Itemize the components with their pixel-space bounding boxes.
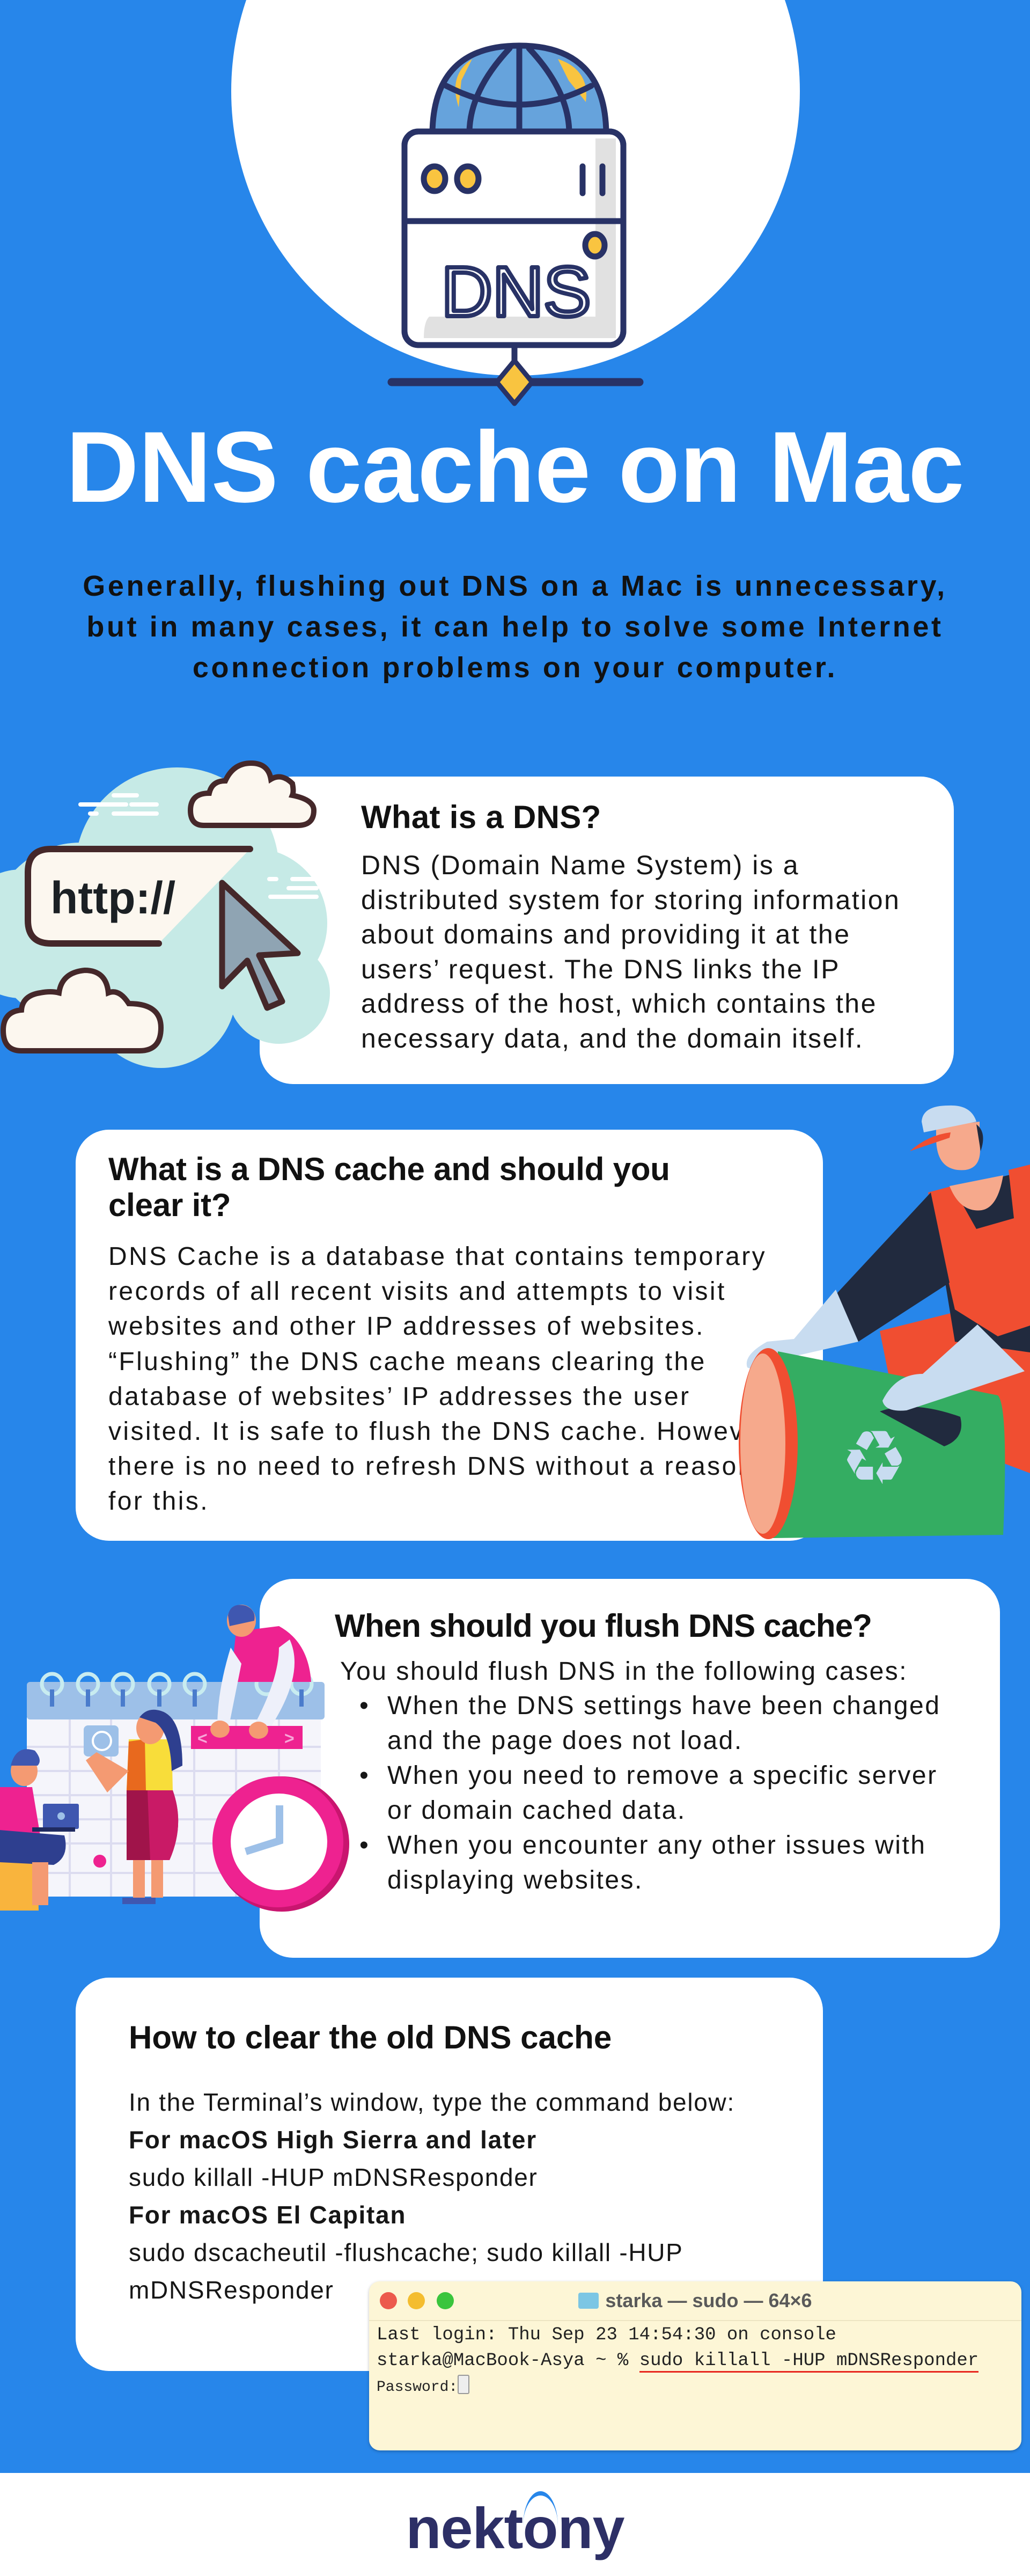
green bin: ♻	[841, 1415, 908, 1502]
text: DNS definition: distributed system for storing information	[361, 885, 900, 915]
text: When the DNS settings have been changed	[387, 1692, 940, 1720]
heading: DNS cache question: What is a DNS cache and should you	[108, 1151, 670, 1187]
head with cap	[910, 1106, 983, 1170]
red legs	[880, 1293, 1030, 1473]
subtitle: but in many cases, it can help to solve some Internet	[86, 611, 944, 643]
traffic lights	[380, 2292, 454, 2309]
terminal output: Last login: Thu Sep 23 14:54:30 on console	[377, 2325, 836, 2345]
text: DNS cache explanation: “Flushing” the DNS cache means clearing the	[108, 1348, 707, 1376]
list: flush cases	[359, 1692, 940, 1894]
pink navigation bar: >	[284, 1729, 295, 1748]
text: flush intro: You should flush DNS in the following cases:	[340, 1657, 908, 1686]
panel: what is a DNS	[260, 777, 954, 1084]
text: or domain cached data.	[387, 1796, 686, 1825]
icon: DNS server with globe: DNS	[442, 252, 591, 331]
text: terminal commands: In the Terminal’s window, type the command below:	[129, 2088, 735, 2116]
terminal title: starka — sudo — 64×6	[605, 2289, 812, 2311]
text: DNS cache explanation: there is no need to refresh DNS without a reason	[108, 1452, 754, 1481]
text: When you encounter any other issues with	[387, 1831, 926, 1860]
text: DNS cache explanation: websites and other IP addresses of websites.	[108, 1312, 705, 1341]
clock	[212, 1776, 349, 1912]
text: DNS cache explanation	[108, 1242, 778, 1516]
text: DNS cache explanation: for this.	[108, 1487, 209, 1516]
heading: how to clear: How to clear the old DNS cache	[129, 2019, 612, 2055]
cursor arrow	[222, 883, 298, 1008]
white dashes	[80, 795, 317, 897]
torso	[928, 1165, 1030, 1352]
text: DNS definition: necessary data, and the domain itself.	[361, 1023, 864, 1053]
calendar	[27, 1674, 325, 1897]
standing woman with clock card	[84, 1710, 182, 1904]
illustration: http browser clouds and cursor	[0, 760, 330, 1068]
glove right with bag	[880, 1324, 1025, 1446]
text: DNS cache explanation: records of all recent visits and attempts to visit	[108, 1277, 726, 1306]
header illustration: white circle and DNS server icon	[231, 0, 800, 406]
heading: when to flush: When should you flush DNS cache?	[335, 1608, 872, 1644]
logo: nektony: nektony	[406, 2496, 624, 2560]
text: terminal commands	[129, 2088, 735, 2304]
http box	[28, 849, 250, 943]
text: terminal commands: mDNSResponder	[129, 2276, 334, 2304]
text: DNS cache explanation: DNS Cache is a database that contains temporary	[108, 1242, 767, 1271]
subtitle: connection problems on your computer.	[193, 652, 837, 684]
text: and the page does not load.	[387, 1726, 743, 1755]
heading: DNS cache question: clear it?	[108, 1187, 231, 1223]
panel: when should you flush DNS cache	[260, 1579, 1000, 1958]
panel: how to clear the old DNS cache	[76, 1978, 823, 2371]
navy arm	[837, 1192, 950, 1342]
pink navigation bar	[191, 1721, 303, 1749]
text: terminal commands: For macOS High Sierra and later	[129, 2126, 537, 2154]
illustration: calendar with people and clock	[0, 1605, 349, 1912]
sitting woman with laptop	[0, 1749, 79, 1911]
green bin	[739, 1348, 1005, 1539]
http box: http://	[50, 873, 175, 923]
heading: DNS cache question	[108, 1151, 670, 1223]
list: flush cases: •	[359, 1761, 370, 1790]
icon: DNS server with globe	[392, 46, 639, 404]
terminal window screenshot	[369, 2281, 1021, 2450]
text: DNS cache explanation: database of websites’ IP addresses the user	[108, 1382, 690, 1411]
text: DNS definition: DNS (Domain Name System) is a	[361, 850, 799, 880]
text: DNS definition: about domains and providing it at the	[361, 919, 851, 949]
text: displaying websites.	[387, 1866, 643, 1894]
title: DNS cache on Mac	[66, 411, 964, 523]
footer band	[0, 2473, 1030, 2576]
text: terminal commands: sudo dscacheutil -flushcache; sudo killall -HUP	[129, 2238, 683, 2266]
terminal output: Password:	[377, 2379, 458, 2396]
glove left	[747, 1290, 858, 1370]
text: DNS definition	[361, 850, 900, 1053]
panel: what is a DNS cache	[76, 1130, 823, 1541]
man leaning over calendar	[217, 1605, 311, 1731]
illustration: worker with recycle bin	[739, 1106, 1030, 1539]
teal cloud backdrop	[0, 767, 330, 1068]
terminal output	[377, 2325, 979, 2396]
text: DNS cache explanation: visited. It is safe to flush the DNS cache. However,	[108, 1417, 778, 1446]
text: terminal commands: sudo killall -HUP mDNSResponder	[129, 2163, 538, 2191]
terminal output: starka@MacBook-Asya ~ % sudo killall -HUP mDNSResponder	[377, 2351, 979, 2371]
clouds	[3, 763, 314, 1051]
list: flush cases: •	[359, 1692, 370, 1720]
heading: What is a DNS?: What is a DNS?	[361, 799, 601, 835]
subtitle	[83, 570, 947, 684]
text: terminal commands: For macOS El Capitan	[129, 2201, 406, 2229]
pink navigation bar: <	[197, 1729, 208, 1748]
text: DNS definition: address of the host, which contains the	[361, 989, 877, 1019]
list: flush cases: •	[359, 1831, 370, 1860]
white circle backdrop	[231, 0, 800, 376]
subtitle: Generally, flushing out DNS on a Mac is unnecessary,	[83, 570, 947, 602]
text: DNS definition: users’ request. The DNS links the IP	[361, 954, 840, 984]
text: When you need to remove a specific server	[387, 1761, 938, 1790]
